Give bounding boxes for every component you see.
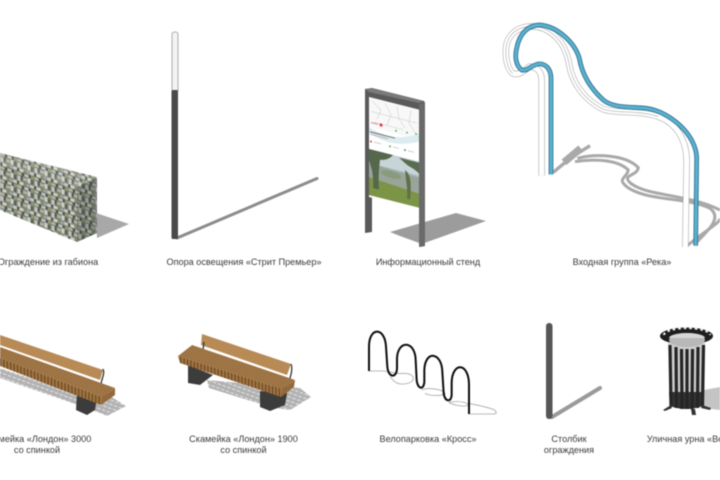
poster text [370,131,414,153]
short bench seat [178,345,295,397]
stand poster [369,97,419,210]
label: river: Входная группа «Река» [573,257,671,267]
long bench seat [0,347,115,405]
street urn [660,328,720,415]
short bench back [201,334,292,384]
bollard [546,323,600,419]
stand frame [365,88,425,247]
label: gabion: Ограждение из габиона [0,257,99,267]
bollard shadow [552,388,600,417]
label: bollard: Столбик [551,434,588,444]
long bench leg [76,392,97,415]
gabion fence [0,153,129,242]
poster photo [369,149,419,208]
urn body [663,343,711,415]
gabion block [0,153,97,242]
label: pole: Опора освещения «Стрит Премьер» [166,257,322,267]
pole white top [172,32,178,91]
bike rack shadow [369,371,496,414]
label: bollard line 2: ограждения [544,445,594,455]
short bench shadow [207,380,311,410]
entrance group River [506,25,720,247]
pole shadow [177,178,317,238]
label: long bench line 2: со спинкой [14,445,60,455]
bike rack [369,332,496,414]
bollard post [546,323,552,419]
poster map [368,100,420,144]
river shadow [553,146,720,246]
stand shadow [390,213,486,244]
bike rack tube [369,332,469,414]
urn shadow [704,387,720,410]
blue ribbon [516,25,697,246]
lighting pole [172,32,317,239]
information stand [365,88,486,247]
label: short bench: Скамейка «Лондон» 1900 [189,434,298,444]
short bench [178,334,311,411]
label: short bench line 2: со спинкой [220,445,267,455]
label: bike rack: Велопарковка «Кросс» [379,434,477,444]
white ribbon [506,26,687,247]
long bench shadow [0,368,126,416]
urn rim [660,328,713,347]
long bench [0,335,126,416]
long bench back [0,335,104,384]
gabion shadow [96,213,129,238]
pole dark shaft [172,90,178,239]
short bench legs [188,365,287,411]
label: stand: Информационный стенд [376,257,481,267]
